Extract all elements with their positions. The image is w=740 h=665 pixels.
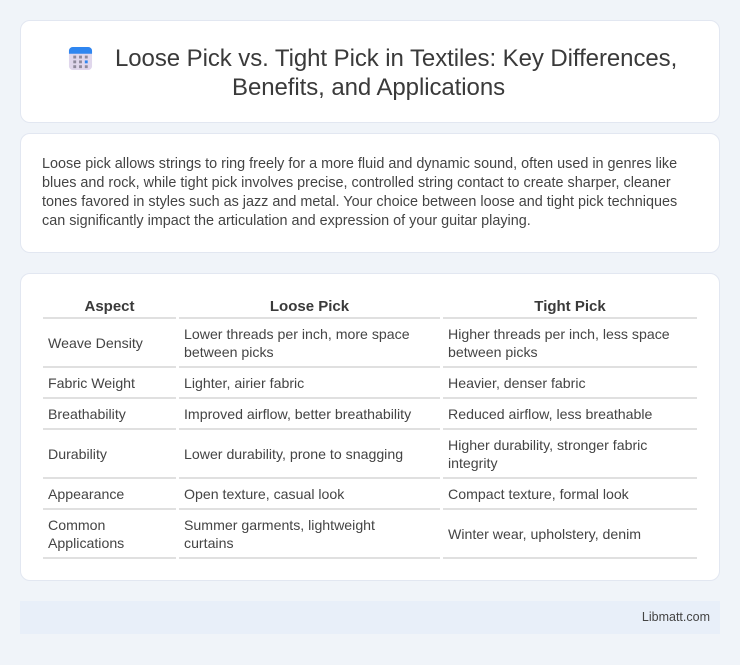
title: Loose Pick vs. Tight Pick in Textiles: Key Differences, [115, 45, 677, 72]
table card [20, 273, 720, 581]
comparison table: Appearance [48, 486, 124, 502]
comparison table: Lower threads per inch, more space [184, 326, 410, 342]
icon: calendar [68, 47, 92, 70]
comparison table: Summer garments, lightweight [184, 517, 375, 533]
comparison table: Improved airflow, better breathability [184, 406, 411, 422]
comparison table: Tight Pick [534, 298, 606, 315]
footer credit: Libmatt.com [642, 610, 710, 624]
intro text: Loose pick allows strings to ring freely for a more fluid and dynamic sound, often used in genres like [42, 156, 677, 172]
comparison table: Lower durability, prone to snagging [184, 446, 403, 462]
header card [20, 20, 720, 123]
comparison table: Common [48, 517, 105, 533]
comparison table: Higher durability, stronger fabric [448, 437, 647, 453]
intro card [20, 133, 720, 253]
intro text [42, 156, 677, 229]
comparison table: between picks [448, 344, 538, 360]
comparison table: Aspect [84, 298, 135, 315]
intro text: tones favored in styles such as jazz and metal. Your choice between loose and tight pick techniques [42, 194, 677, 210]
comparison table: Durability [48, 446, 107, 462]
comparison table: Weave Density [48, 335, 143, 351]
comparison table: Lighter, airier fabric [184, 375, 304, 391]
comparison table [43, 298, 697, 559]
footer bar [20, 601, 720, 634]
comparison table: between picks [184, 344, 274, 360]
comparison table: Heavier, denser fabric [448, 375, 586, 391]
comparison table: Open texture, casual look [184, 486, 344, 502]
comparison table: Reduced airflow, less breathable [448, 406, 652, 422]
comparison table: curtains [184, 535, 234, 551]
comparison table: Winter wear, upholstery, denim [448, 526, 641, 542]
comparison table: Applications [48, 535, 124, 551]
comparison table: integrity [448, 455, 498, 471]
intro text: blues and rock, while tight pick involves precise, controlled string contact to create sharper, cleaner [42, 175, 671, 191]
comparison table: Compact texture, formal look [448, 486, 629, 502]
comparison table: Higher threads per inch, less space [448, 326, 670, 342]
comparison table: Breathability [48, 406, 126, 422]
comparison table: Fabric Weight [48, 375, 135, 391]
comparison table: Loose Pick [270, 298, 349, 315]
intro text: can significantly impact the articulation and expression of your guitar playing. [42, 213, 531, 229]
title [115, 45, 677, 101]
title: Benefits, and Applications [232, 74, 505, 101]
